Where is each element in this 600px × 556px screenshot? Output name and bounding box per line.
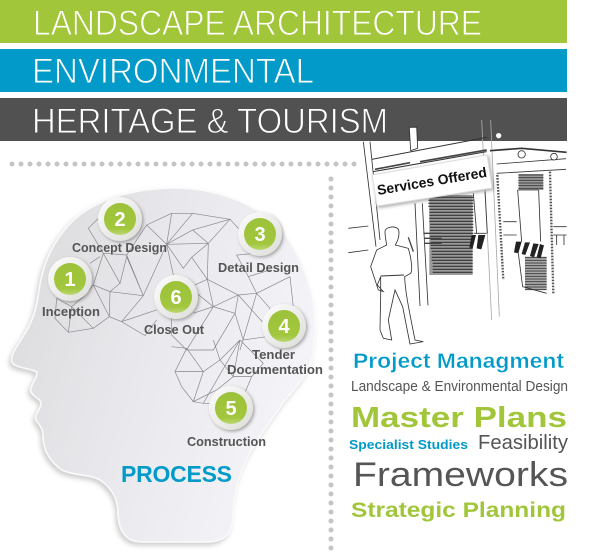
step 6: close out	[144, 275, 205, 337]
services offered sign: Services Offered	[376, 164, 488, 198]
services word cloud: Feasibility	[478, 432, 568, 454]
header band: environmental: ENVIRONMENTAL	[32, 52, 314, 91]
step 2: concept design: 2	[114, 209, 126, 231]
step 4: tender documentation	[227, 304, 323, 377]
services word cloud: Landscape & Environmental Design	[351, 379, 568, 395]
services offered sign	[372, 155, 492, 206]
step 6: close out: 6	[170, 287, 182, 309]
process heading: PROCESS	[121, 461, 232, 487]
services word cloud: Project Managment	[353, 350, 564, 373]
services word cloud: Frameworks	[353, 456, 568, 494]
services word cloud	[349, 350, 568, 522]
header band: environmental	[0, 49, 567, 92]
header band: landscape architecture: LANDSCAPE ARCHITECTURE	[33, 4, 482, 43]
step 3: detail design: Detail Design	[218, 260, 299, 275]
brain network	[55, 213, 293, 403]
step 1: inception: 1	[64, 269, 76, 291]
head silhouette	[12, 188, 315, 542]
step 3: detail design: 3	[254, 224, 266, 246]
step 4: tender documentation: Documentation	[227, 362, 323, 377]
step 5: construction: Construction	[187, 434, 266, 449]
services word cloud: Master Plans	[351, 402, 567, 434]
step 5: construction: 5	[225, 398, 237, 420]
header band: heritage and tourism: HERITAGE & TOURISM	[32, 102, 388, 141]
sketch: man viewing exhibition stalls	[348, 120, 567, 344]
step 5: construction	[187, 386, 266, 449]
step 4: tender documentation: Tender	[252, 347, 295, 362]
services word cloud: Strategic Planning	[351, 499, 566, 522]
step 2: concept design: Concept Design	[72, 240, 167, 255]
step 3: detail design	[218, 212, 299, 275]
step 2: concept design	[72, 197, 167, 255]
step 1: inception	[42, 257, 100, 319]
header band: heritage and tourism	[0, 98, 567, 141]
step 6: close out: Close Out	[144, 322, 205, 337]
step 1: inception: Inception	[42, 304, 100, 319]
step 4: tender documentation: 4	[278, 316, 290, 338]
services word cloud: Specialist Studies	[349, 437, 468, 452]
